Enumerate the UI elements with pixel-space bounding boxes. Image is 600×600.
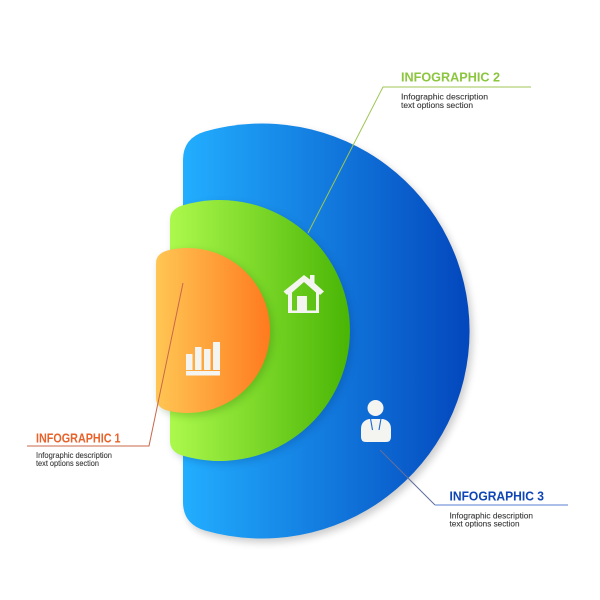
callout: infographic 2: INFOGRAPHIC 2 <box>401 70 500 84</box>
callout: infographic 2: Infographic description <box>401 92 488 102</box>
icon: person <box>361 400 391 442</box>
panel: orange semicircle <box>156 248 273 416</box>
panel: blue semicircle <box>183 124 473 543</box>
callout: infographic 1 <box>27 283 183 468</box>
icon: house <box>284 275 324 313</box>
callout: infographic 1: Infographic description <box>36 450 112 460</box>
callout: infographic 3: INFOGRAPHIC 3 <box>450 488 544 504</box>
callout: infographic 2 <box>308 70 531 233</box>
panel: green semicircle <box>170 200 353 464</box>
callout: infographic 1: text options section <box>36 458 99 468</box>
callout: infographic 2: text options section <box>401 100 473 110</box>
callout: infographic 1: INFOGRAPHIC 1 <box>36 430 120 446</box>
callout: infographic 3: Infographic description <box>450 510 533 520</box>
callout: infographic 3: text options section <box>450 518 520 528</box>
callout: infographic 3 <box>380 450 568 528</box>
icon: bar chart <box>186 342 220 376</box>
